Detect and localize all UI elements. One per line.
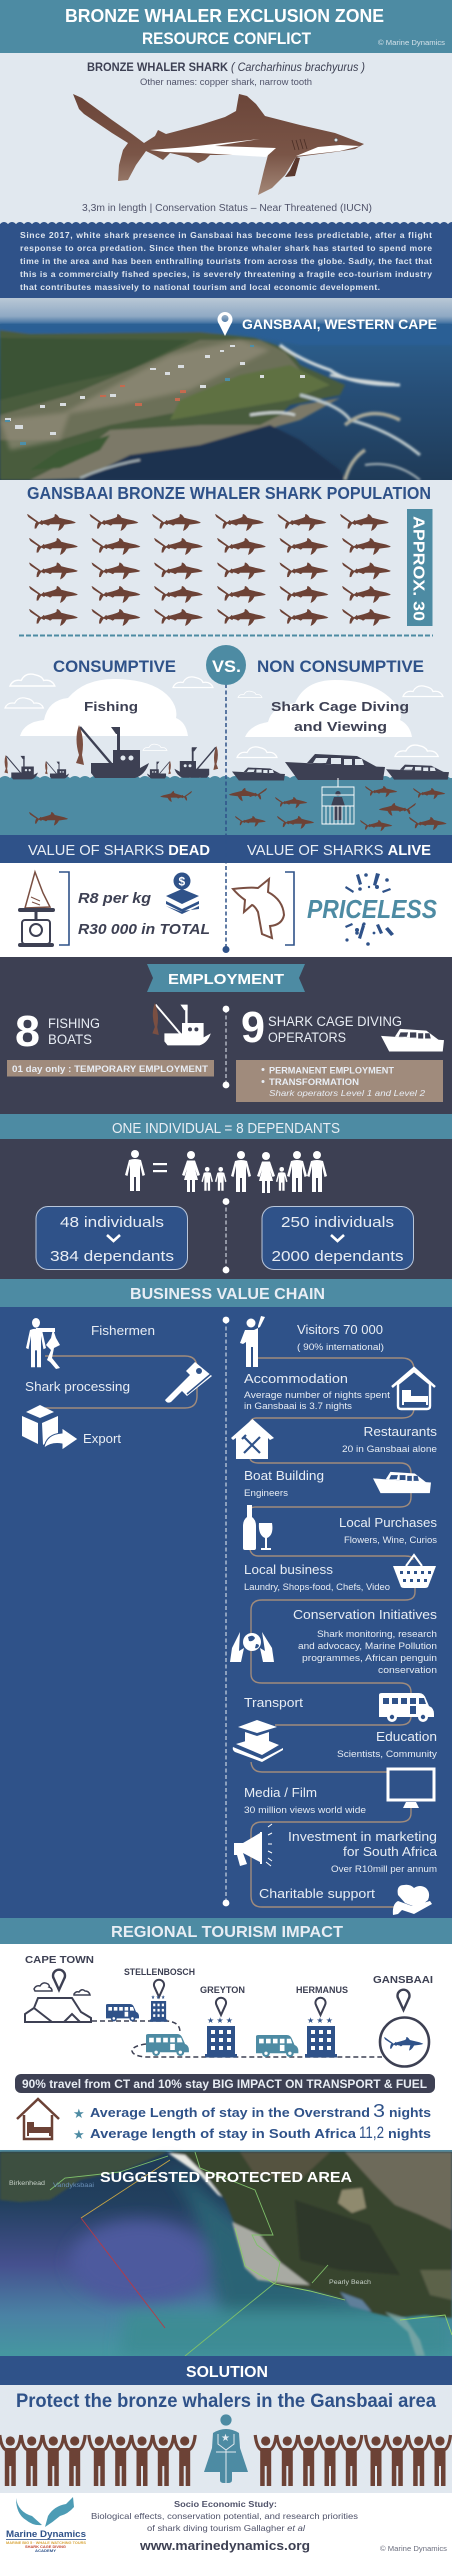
- priceless: PRICELESS: [307, 894, 438, 924]
- species name: BRONZE WHALER SHARK: [87, 60, 228, 74]
- label: visitors: [297, 1323, 384, 1353]
- location pin: [218, 312, 232, 336]
- greyton: GREYTON: [200, 1985, 245, 1995]
- icon: confetti: [345, 873, 394, 946]
- heading: SUGGESTED PROTECTED AREA: [100, 2169, 352, 2186]
- icon: visitor: [240, 1316, 265, 1367]
- sky clouds: [5, 674, 443, 758]
- main title: BRONZE WHALER EXCLUSION ZONE: [65, 6, 384, 26]
- icon: megaphone: [234, 1824, 272, 1866]
- greyton: [200, 1985, 245, 2058]
- icon: bus: [379, 1693, 434, 1722]
- label: charitable support: Charitable support: [259, 1887, 376, 1901]
- cape town: [25, 1954, 94, 2022]
- stat: overstrand stay: [73, 2101, 431, 2121]
- latin name: ( Carcharhinus brachyurus ): [231, 62, 365, 74]
- label: conservation: and advocacy, Marine Pollution: [298, 1641, 437, 1652]
- icon: basket: [393, 1555, 436, 1588]
- sharks: non consumptive side: [229, 786, 447, 831]
- label: education: Education: [376, 1730, 437, 1744]
- label: restaurants: 20 in Gansbaai alone: [342, 1444, 437, 1455]
- label: boat building: Engineers: [244, 1488, 288, 1499]
- heading: consumptive: CONSUMPTIVE: [53, 658, 176, 676]
- icon: shark outline: [233, 879, 284, 938]
- label: media: Media / Film: [244, 1786, 317, 1800]
- stat: south africa stay: 11,2: [359, 2123, 384, 2142]
- operators number: 9: [241, 1003, 265, 1052]
- divider: [223, 1317, 229, 1906]
- boundary lines: [50, 2152, 452, 2356]
- label: education: [337, 1730, 437, 1760]
- label: visitors: ( 90% international): [297, 1342, 384, 1353]
- box: non consumptive dependants: [262, 1206, 414, 1270]
- stat: south africa stay: Average length of stay in South Africa: [90, 2126, 357, 2141]
- heading band: solution: [0, 2356, 452, 2385]
- other names: Other names: copper shark, narrow tooth: [140, 77, 312, 87]
- box: consumptive dependants: 384 dependants: [50, 1248, 174, 1265]
- operators label: OPERATORS: [268, 1030, 346, 1045]
- place labels: Pearly Beach: [329, 2279, 371, 2286]
- divider: [223, 1006, 229, 1088]
- label: conservation: programmes, African penguin: [302, 1653, 437, 1664]
- stat: south africa stay: [73, 2123, 431, 2142]
- heading band: regional tourism: [0, 1918, 452, 1944]
- stat: overstrand stay: 3: [373, 2101, 385, 2121]
- place labels: Vandyksbaai: [53, 2182, 94, 2189]
- temporary employment bar: 01 day only : TEMPORARY EMPLOYMENT: [12, 1064, 208, 1075]
- vs badge: VS.: [212, 658, 241, 676]
- label: local business: [244, 1563, 390, 1593]
- box: non consumptive dependants: 250 individuals: [281, 1214, 394, 1231]
- icon: wine: [243, 1505, 272, 1550]
- total price: R30 000 in TOTAL: [78, 921, 210, 938]
- label: conservation: Conservation Initiatives: [293, 1608, 437, 1622]
- label: accommodation: Average number of nights spent: [244, 1390, 390, 1401]
- paragraph text: time in the area and has been enthralling tourists from across the globe. Sadly, the fact that: [20, 256, 432, 266]
- label: boat building: [244, 1469, 324, 1499]
- photo: Gansbaai aerial view: [0, 298, 452, 480]
- label: accommodation: Accommodation: [244, 1372, 348, 1386]
- stat: overstrand stay: Average Length of stay in the Overstrand: [90, 2105, 370, 2120]
- panel: species profile: [0, 53, 452, 223]
- icon: cage boat: [381, 1029, 444, 1051]
- subtitle: RESOURCE CONFLICT: [142, 30, 311, 48]
- label: cage diving: Shark Cage Diving: [271, 699, 409, 714]
- permanent employment box: PERMANENT EMPLOYMENT: [269, 1066, 394, 1076]
- approx 30 label: APPROX. 30: [410, 516, 426, 621]
- cage diving boats: [232, 754, 449, 780]
- icon: house with bed: [17, 2099, 59, 2139]
- label: transport: Transport: [244, 1696, 304, 1710]
- fishing boats number: 8: [15, 1007, 40, 1056]
- operators label: SHARK CAGE DIVING: [268, 1014, 402, 1029]
- location label: GANSBAAI, WESTERN CAPE: [242, 316, 437, 332]
- paragraph text: response to orca predation. Since then the bronze whaler shark has started to spend more: [20, 243, 432, 253]
- travel pill: [15, 2074, 435, 2093]
- icon: fisherman with shark: [26, 1318, 60, 1369]
- icon: hands and globe: [230, 1632, 274, 1662]
- logo: Marine Dynamics: Marine Dynamics: [6, 2529, 86, 2540]
- box: non consumptive dependants: 2000 dependants: [272, 1248, 404, 1265]
- shark population grid: [27, 514, 391, 626]
- approx 30 label: [407, 509, 432, 626]
- logo: Marine Dynamics: MARINE BIG 5 · WHALE WATCHING TOURS: [6, 2541, 86, 2545]
- stat: south africa stay: nights: [388, 2126, 431, 2141]
- box: consumptive dependants: [36, 1206, 188, 1270]
- logo: Marine Dynamics: SHARK CAGE DIVING: [25, 2545, 66, 2549]
- label: media: 30 million views world wide: [244, 1805, 366, 1816]
- icon: boat: [373, 1472, 431, 1493]
- label: accommodation: [244, 1372, 390, 1412]
- panel: regional route: [0, 1944, 452, 2150]
- icon: graduation book: [233, 1720, 283, 1762]
- value band: [0, 835, 452, 863]
- fishing boats label: FISHING: [48, 1016, 100, 1031]
- heading band: solution: SOLUTION: [186, 2364, 268, 2381]
- teal bus two: [256, 2035, 298, 2057]
- gansbaai: [373, 1974, 433, 2066]
- panel: employment: [0, 957, 452, 1280]
- panel: shark values: [0, 863, 452, 957]
- label: shark processing: Shark processing: [25, 1380, 130, 1394]
- footer: [0, 2493, 452, 2560]
- icon: export box: [22, 1405, 78, 1450]
- label: marketing: [288, 1830, 437, 1875]
- sharks: consumptive side: [29, 791, 192, 826]
- route dashed line: [92, 2021, 382, 2057]
- stat: overstrand stay: ★: [73, 2106, 85, 2121]
- employment ribbon: EMPLOYMENT: [168, 971, 284, 988]
- label: education: Scientists, Community: [337, 1749, 437, 1760]
- panel: solution: [0, 2385, 452, 2493]
- label: boat building: Boat Building: [244, 1469, 324, 1483]
- dependants band: [0, 1114, 452, 1139]
- icon: fin on scale: [18, 872, 55, 947]
- navy bus: [106, 2004, 139, 2021]
- label: viewing: and Viewing: [294, 719, 387, 734]
- superhero: ★: [221, 2433, 230, 2444]
- study citation: Biological effects, conservation potential, and research priorities: [91, 2511, 358, 2521]
- label: restaurants: [342, 1425, 437, 1455]
- length and conservation status: 3,3m in length | Conservation Status – Near Threatened (IUCN): [82, 203, 372, 214]
- place labels: Birkenhead: [9, 2180, 45, 2187]
- box: consumptive dependants: 48 individuals: [60, 1214, 164, 1231]
- solution statement: Protect the bronze whalers in the Gansbaai area: [16, 2391, 436, 2412]
- paragraph text: [20, 230, 432, 292]
- icon: fishing boat: [152, 1003, 211, 1045]
- label: marketing: for South Africa: [343, 1845, 437, 1859]
- label: fishing: Fishing: [84, 699, 138, 714]
- heading band: regional tourism: REGIONAL TOURISM IMPACT: [111, 1924, 344, 1941]
- icon: cleaver: [165, 1362, 212, 1403]
- vs badge: [206, 645, 246, 685]
- temporary employment bar: [7, 1060, 214, 1076]
- header banner: [0, 0, 452, 53]
- label: local purchases: [339, 1516, 437, 1546]
- teal bus one: [146, 2034, 189, 2056]
- label: export: Export: [83, 1432, 122, 1446]
- employment ribbon: [147, 964, 305, 992]
- label: accommodation: in Gansbaai is 3.7 nights: [244, 1401, 352, 1412]
- heading band: business value chain: [0, 1279, 452, 1307]
- stat: south africa stay: ★: [73, 2127, 85, 2142]
- label: marketing: Over R10mill per annum: [331, 1864, 437, 1875]
- panel: intro paragraph: [0, 222, 452, 298]
- hermanus: HERMANUS: [296, 1985, 348, 1995]
- website: www.marinedynamics.org: [139, 2539, 310, 2553]
- label: fishermen: Fishermen: [91, 1324, 155, 1338]
- study citation: [91, 2499, 358, 2533]
- paragraph text: Since 2017, white shark presence in Gansbaai has become less predictable, after a flight: [20, 230, 432, 240]
- study citation: Socio Economic Study:: [174, 2499, 277, 2509]
- cape town: CAPE TOWN: [25, 1954, 94, 1966]
- logo: Marine Dynamics: [6, 2497, 86, 2553]
- human chain right: [255, 2435, 450, 2486]
- copyright: © Marine Dynamics: [380, 2544, 447, 2553]
- value of sharks alive: VALUE OF SHARKS ALIVE: [247, 843, 431, 859]
- paragraph text: this is a commercially fished species, is severely threatening a fragile eco-tourism industry: [20, 269, 432, 279]
- label: conservation: conservation: [378, 1665, 437, 1676]
- permanent employment box: TRANSFORMATION: [269, 1077, 359, 1088]
- price per kg: R8 per kg: [78, 890, 151, 907]
- panel: consumptive vs non consumptive: [0, 658, 452, 863]
- study citation: of shark diving tourism Gallagher et al: [147, 2523, 306, 2533]
- icon: heart in hand: [393, 1885, 432, 1915]
- travel pill: 90% travel from CT and 10% stay BIG IMPACT ON TRANSPORT & FUEL: [22, 2079, 427, 2091]
- label: marketing: Investment in marketing: [288, 1830, 437, 1844]
- permanent employment box: Shark operators Level 1 and Level 2: [269, 1088, 425, 1098]
- vs divider line: [222, 684, 230, 953]
- panel: business value chain: [0, 1307, 452, 1918]
- icon: restaurant: [231, 1419, 274, 1459]
- stellenbosch: [124, 1967, 195, 2022]
- icon: money stack: [166, 872, 199, 914]
- label: conservation: Shark monitoring, research: [317, 1629, 437, 1640]
- stat: overstrand stay: nights: [389, 2105, 431, 2120]
- human chain left: [0, 2435, 195, 2486]
- label: local business: Laundry, Shops-food, Chefs, Video: [244, 1582, 390, 1593]
- sea: [0, 776, 452, 835]
- superhero: [204, 2414, 248, 2483]
- label: conservation: [293, 1608, 437, 1676]
- place labels: [9, 2180, 371, 2286]
- illustration: bronze whaler shark: [73, 94, 364, 195]
- label: restaurants: Restaurants: [364, 1425, 437, 1439]
- fishing boats: [4, 725, 218, 779]
- panel: population: [0, 480, 452, 778]
- label: local purchases: Flowers, Wine, Curios: [344, 1535, 437, 1546]
- value of sharks dead: VALUE OF SHARKS DEAD: [28, 843, 210, 859]
- permanent employment box: [236, 1060, 443, 1102]
- icon: one individual equals family: [125, 1150, 327, 1193]
- divider: [223, 1198, 229, 1273]
- heading: non consumptive: NON CONSUMPTIVE: [257, 658, 424, 676]
- hermanus: [296, 1985, 348, 2058]
- paragraph text: that contributes massively to national tourism and local economic development.: [20, 282, 380, 292]
- connectors: consumptive chain: [45, 1356, 197, 1408]
- gansbaai: GANSBAAI: [373, 1974, 433, 1986]
- connectors: non consumptive chain: [248, 1358, 415, 1907]
- heading band: business value chain: BUSINESS VALUE CHAIN: [130, 1286, 325, 1303]
- operators label: [268, 1014, 402, 1045]
- label: local purchases: Local Purchases: [339, 1516, 437, 1530]
- stellenbosch: STELLENBOSCH: [124, 1967, 195, 1977]
- dependants band: ONE INDIVIDUAL = 8 DEPENDANTS: [112, 1121, 340, 1137]
- map: suggested protected area: [0, 2150, 452, 2356]
- label: visitors: Visitors 70 000: [297, 1323, 383, 1337]
- icon: accommodation house: [392, 1368, 435, 1409]
- logo: Marine Dynamics: ACADEMY: [35, 2549, 57, 2553]
- fishing boats label: [48, 1016, 100, 1047]
- label: media: [244, 1786, 366, 1816]
- icon: monitor: [388, 1769, 434, 1808]
- shark cage with diver: [322, 778, 354, 824]
- label: local business: Local business: [244, 1563, 333, 1577]
- icon: money stack: $: [178, 874, 186, 888]
- fishing boats label: BOATS: [48, 1032, 92, 1047]
- copyright: © Marine Dynamics: [378, 38, 445, 47]
